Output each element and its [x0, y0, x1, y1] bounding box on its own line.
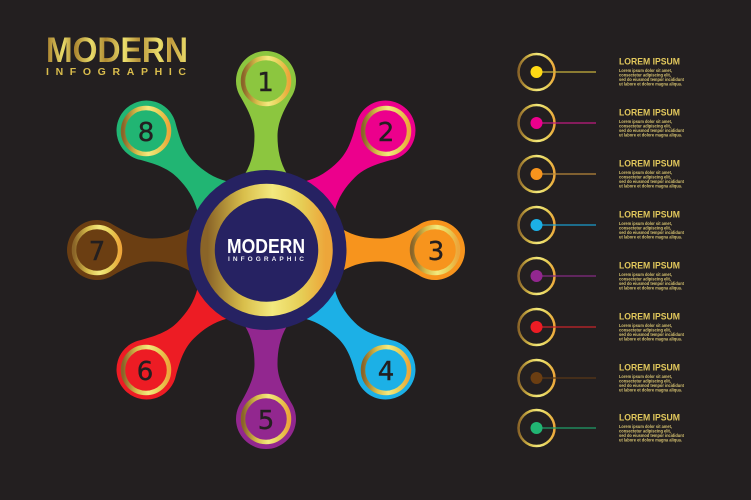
legend item 8: ut labore et dolore magna aliqua. — [619, 438, 682, 442]
legend item 4 — [518, 207, 684, 243]
arm 4 blue — [280, 264, 428, 412]
legend item 7: LOREM IPSUM — [619, 362, 680, 372]
legend item 7: Lorem ipsum dolor sit amet, — [619, 374, 672, 379]
arm 5 purple — [236, 300, 296, 449]
node 2: 2 — [378, 118, 394, 148]
node 3: 3 — [428, 237, 444, 267]
legend item 6: LOREM IPSUM — [619, 312, 680, 322]
legend item 2 — [518, 105, 684, 141]
arm 3 orange — [316, 220, 465, 280]
node 4: 4 — [378, 357, 394, 387]
title: INFOGRAPHIC — [46, 66, 186, 78]
node 1 — [243, 58, 289, 104]
node 2 — [363, 108, 409, 154]
legend item 4: ut labore et dolore magna aliqua. — [619, 234, 682, 240]
legend item 5: consectetur adipiscing elit, — [619, 276, 671, 282]
node 4 — [363, 347, 409, 393]
legend item 1: Lorem ipsum dolor sit amet, — [619, 68, 672, 73]
centre hub: INFOGRAPHIC — [228, 256, 304, 263]
legend item 5: LOREM IPSUM — [619, 260, 680, 270]
node 3 — [412, 227, 458, 273]
legend item 7 — [518, 360, 684, 396]
node 7 — [74, 227, 120, 273]
legend item 7: consectetur adipiscing elit, — [619, 378, 671, 384]
legend item 8 — [518, 410, 684, 446]
legend item 5: Lorem ipsum dolor sit amet, — [619, 272, 672, 277]
node 8: 8 — [138, 118, 154, 148]
legend item 8: consectetur adipiscing elit, — [619, 428, 671, 434]
centre hub — [186, 170, 346, 330]
legend item 2: consectetur adipiscing elit, — [619, 124, 671, 128]
node 5: 5 — [258, 406, 274, 436]
legend item 3: Lorem ipsum dolor sit amet, — [619, 170, 672, 175]
legend item 8: sed do eiusmod tempor incididunt — [619, 433, 684, 438]
legend item 3: LOREM IPSUM — [619, 158, 680, 168]
title: MODERN — [46, 31, 188, 70]
legend item 1: sed do eiusmod tempor incididunt — [619, 77, 684, 82]
legend item 1 — [518, 54, 684, 90]
legend item 6: Lorem ipsum dolor sit amet, — [619, 323, 672, 328]
legend item 3 — [518, 156, 684, 192]
legend item 7: ut labore et dolore magna aliqua. — [619, 388, 682, 392]
arm 8 teal — [104, 88, 252, 236]
legend item 3: consectetur adipiscing elit, — [619, 174, 671, 180]
legend item 3: sed do eiusmod tempor incididunt — [619, 179, 684, 184]
legend item 2: Lorem ipsum dolor sit amet, — [619, 119, 672, 124]
legend list — [518, 54, 684, 446]
legend item 1: consectetur adipiscing elit, — [619, 72, 671, 78]
legend item 7: sed do eiusmod tempor incididunt — [619, 383, 684, 388]
node 6: 6 — [137, 357, 153, 387]
legend item 4: consectetur adipiscing elit, — [619, 226, 671, 230]
legend item 8: LOREM IPSUM — [619, 412, 680, 422]
centre hub: MODERN — [227, 236, 305, 258]
legend item 1: LOREM IPSUM — [619, 56, 680, 66]
legend item 4: Lorem ipsum dolor sit amet, — [619, 221, 672, 226]
radial diagram — [67, 51, 465, 449]
legend item 6 — [518, 309, 684, 345]
arm 2 pink — [280, 88, 428, 236]
node 5 — [243, 396, 289, 442]
legend item 8: Lorem ipsum dolor sit amet, — [619, 424, 672, 429]
legend item 6: sed do eiusmod tempor incididunt — [619, 332, 684, 337]
legend item 4: sed do eiusmod tempor incididunt — [619, 230, 684, 235]
node 6 — [123, 347, 169, 393]
node 7: 7 — [89, 237, 105, 267]
legend item 2: ut labore et dolore magna aliqua. — [619, 132, 682, 138]
legend item 2: LOREM IPSUM — [619, 108, 680, 118]
legend item 5: sed do eiusmod tempor incididunt — [619, 281, 684, 286]
legend item 5: ut labore et dolore magna aliqua. — [619, 286, 682, 290]
node 1: 1 — [257, 68, 274, 98]
legend item 6: ut labore et dolore magna aliqua. — [619, 336, 682, 342]
arm 7 brown — [67, 220, 216, 280]
arm 6 red — [104, 264, 252, 412]
legend item 3: ut labore et dolore magna aliqua. — [619, 184, 682, 188]
arm 1 green — [236, 51, 296, 200]
legend item 2: sed do eiusmod tempor incididunt — [619, 128, 684, 133]
legend item 1: ut labore et dolore magna aliqua. — [619, 82, 682, 86]
legend item 4: LOREM IPSUM — [619, 210, 680, 220]
legend item 6: consectetur adipiscing elit, — [619, 328, 671, 332]
legend item 5 — [518, 258, 684, 294]
node 8 — [123, 108, 169, 154]
